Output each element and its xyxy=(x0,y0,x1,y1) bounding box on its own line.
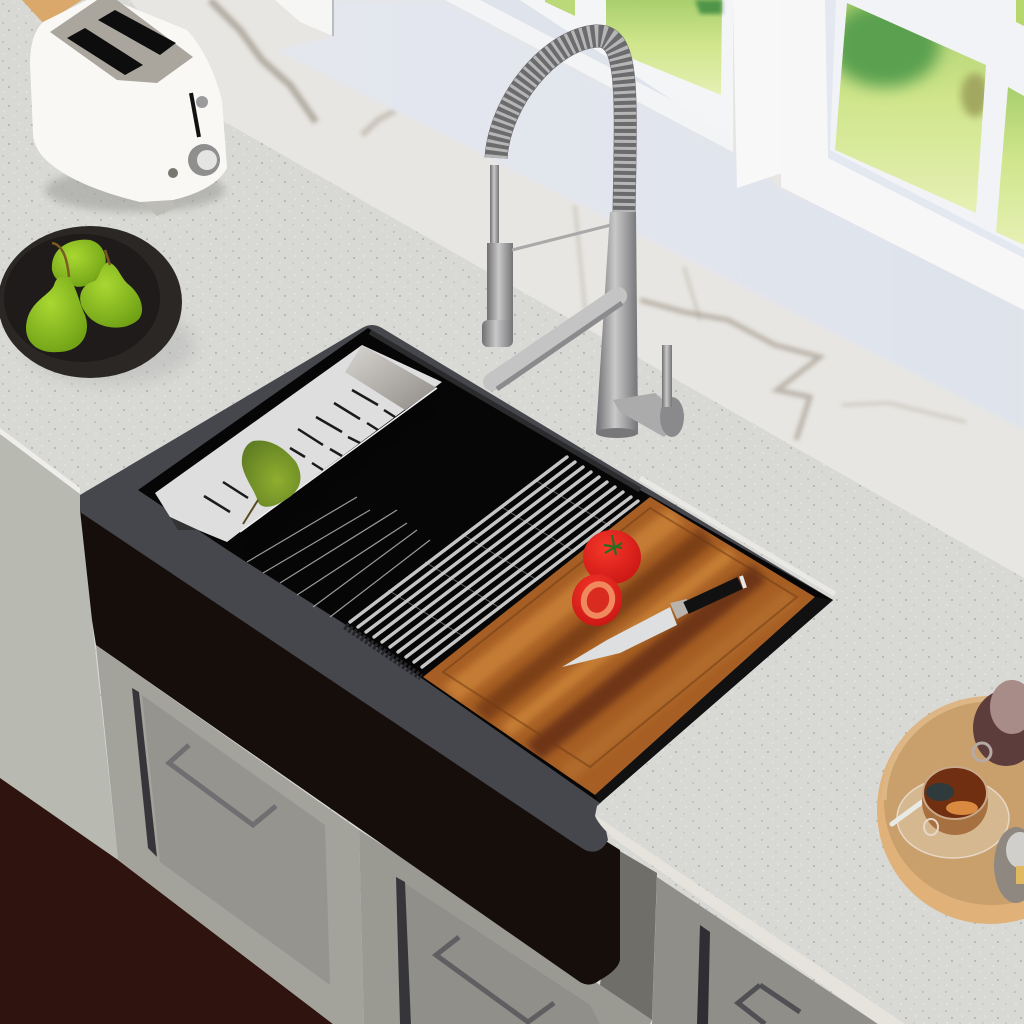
faucet body xyxy=(596,212,638,433)
black rim back xyxy=(370,332,640,490)
left window glass small xyxy=(545,0,575,16)
left window frame xyxy=(445,0,733,152)
lower sink rack wires xyxy=(247,497,430,617)
handle lever xyxy=(613,393,684,437)
counter ridge around sink xyxy=(640,478,835,594)
lower drawer right xyxy=(652,877,878,1024)
right window frame xyxy=(781,0,1024,310)
wood grain xyxy=(450,515,792,775)
drawer handle xyxy=(436,937,554,1022)
tray slots xyxy=(204,390,395,512)
roll-up drying rack xyxy=(345,457,638,677)
spoon xyxy=(892,802,922,824)
lower drawer left xyxy=(96,645,364,1024)
pull-down rod xyxy=(490,165,499,250)
marble backsplash xyxy=(130,0,1024,578)
black slot shadow right of board xyxy=(595,597,833,803)
tray with tea set xyxy=(877,680,1024,924)
right window glass top xyxy=(1016,0,1024,26)
window mullion xyxy=(733,0,785,188)
lower drawer middle xyxy=(359,830,652,1024)
recess strip xyxy=(132,688,157,857)
right window glass narrow xyxy=(996,87,1024,245)
knife xyxy=(562,576,745,667)
sink apron xyxy=(80,510,620,985)
tray divider wall xyxy=(240,388,442,560)
recess strip xyxy=(697,925,710,1024)
front pear xyxy=(26,277,87,352)
tray back wall xyxy=(345,345,437,410)
juice groove xyxy=(443,508,797,767)
tomatoes xyxy=(565,530,641,633)
rack bars xyxy=(350,457,638,667)
left cabinet door xyxy=(0,434,118,860)
garden bush xyxy=(830,3,989,117)
recess strip xyxy=(396,877,411,1024)
drawer handle xyxy=(738,985,800,1024)
spout xyxy=(492,296,618,382)
toaster xyxy=(22,0,227,216)
left window glass xyxy=(606,0,722,95)
right window glass main xyxy=(835,3,986,213)
faucet xyxy=(482,36,684,438)
plate with pears xyxy=(0,226,195,385)
saucer xyxy=(897,778,1009,858)
wooden board behind toaster xyxy=(22,0,82,24)
wall trim at left of window xyxy=(275,0,333,36)
narrow cabinet panel xyxy=(600,850,657,1020)
drawer handle xyxy=(169,745,276,825)
right pear xyxy=(80,262,142,328)
right counter section xyxy=(595,600,1024,1024)
sink top deck xyxy=(80,325,833,852)
floor xyxy=(0,778,333,1024)
window sill xyxy=(275,0,1024,430)
pear in tray xyxy=(242,440,300,524)
spring hose xyxy=(496,36,625,215)
back pear xyxy=(52,240,106,287)
tea cup xyxy=(922,767,988,835)
rubber rack strip xyxy=(345,626,421,677)
glass jar xyxy=(994,827,1024,903)
counter front edge left xyxy=(0,428,80,498)
cutting board xyxy=(423,497,815,795)
glass teapot xyxy=(973,680,1024,766)
tray top rim highlight xyxy=(884,699,985,800)
colander tray xyxy=(155,345,442,560)
counter front edge xyxy=(596,816,905,1024)
cross wires xyxy=(388,480,610,636)
spray head xyxy=(487,243,513,327)
sink basin xyxy=(138,328,833,803)
